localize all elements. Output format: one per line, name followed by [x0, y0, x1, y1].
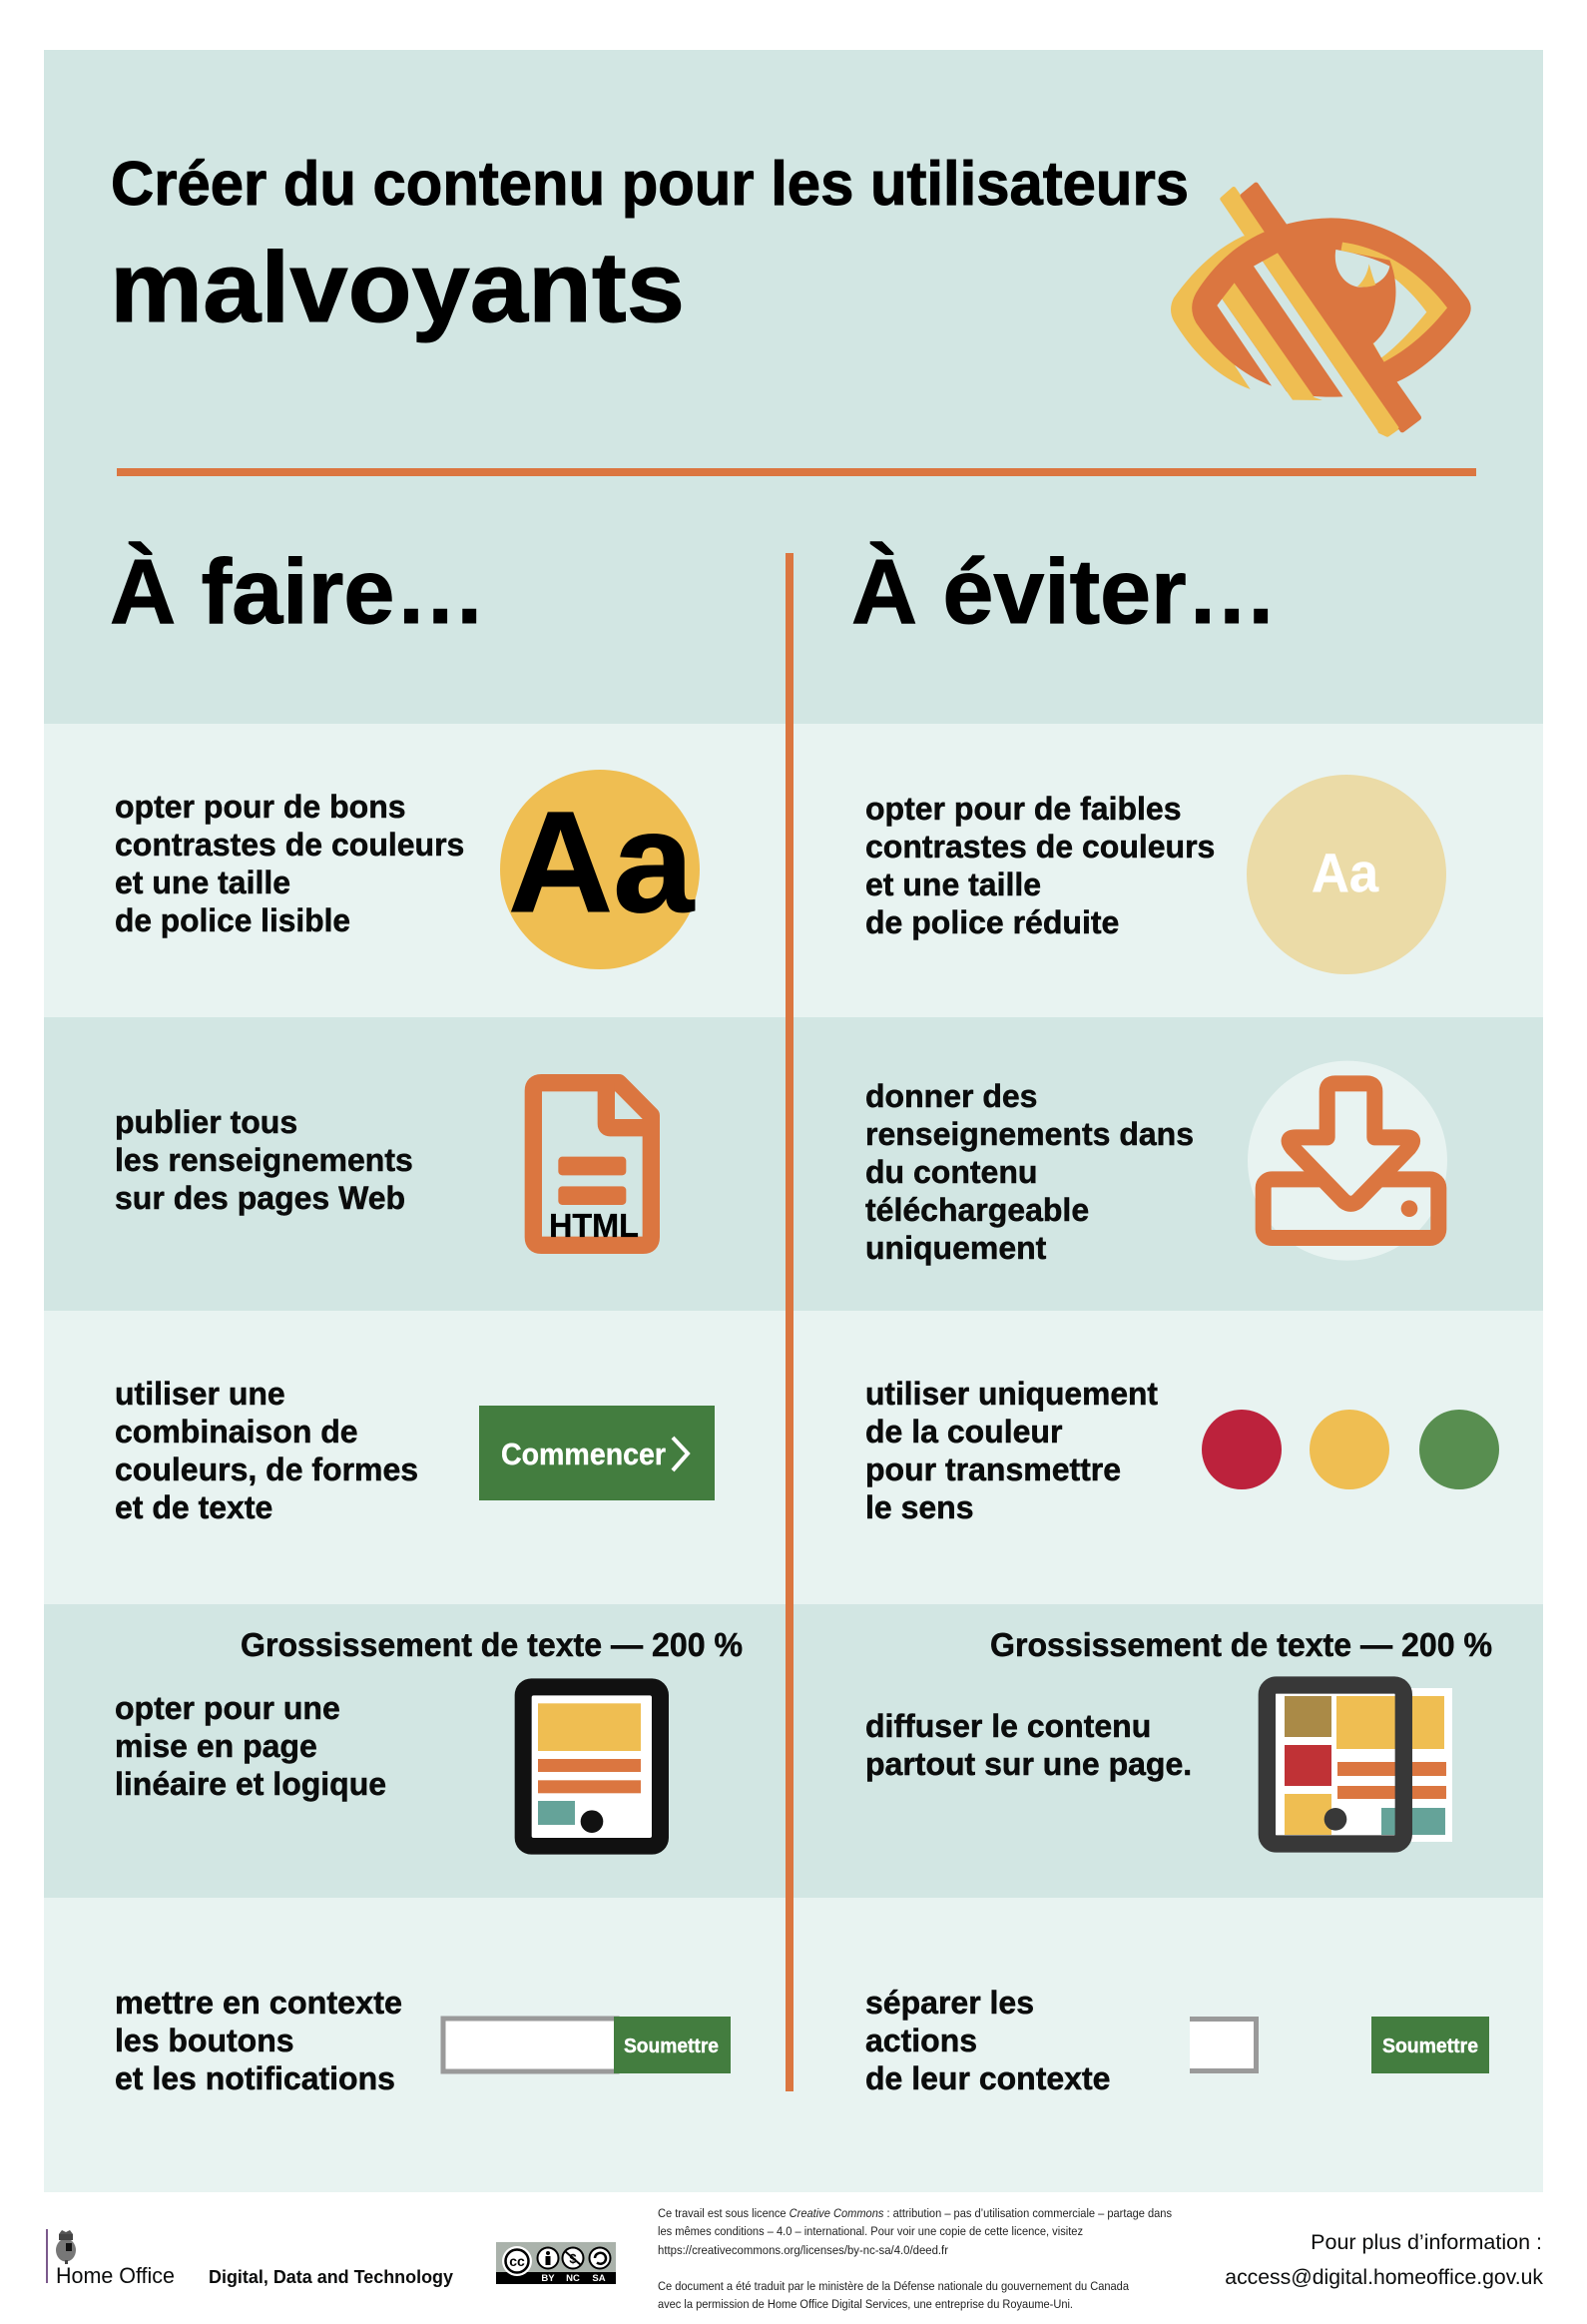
row 5 avoid: text: de leur contexte [865, 2060, 1110, 2096]
footer: contact: Pour plus d’information : [1311, 2230, 1542, 2254]
row 4 do: text: opter pour une [115, 1690, 340, 1726]
icon: crossed-out eye [1171, 185, 1471, 437]
panel: row 5 background [44, 1898, 1543, 2192]
row 4 avoid: heading: Grossissement de texte — 200 % [990, 1626, 1492, 1663]
form: input separated from button: Soumettre [1382, 2034, 1478, 2057]
row 1 avoid: text [865, 791, 1215, 940]
row 2 do: text: les renseignements [115, 1142, 413, 1178]
row 1 avoid: text: contrastes de couleurs [865, 829, 1215, 865]
row 5 avoid: text: séparer les [865, 1985, 1034, 2021]
button: Commencer: Commencer [501, 1437, 666, 1471]
row 2 avoid: text [865, 1078, 1194, 1266]
row 1 do: text: opter pour de bons [115, 789, 406, 825]
row 4 avoid: text: diffuser le contenu [865, 1708, 1151, 1744]
row 4 do: text [115, 1690, 386, 1802]
icon: low contrast Aa [1247, 775, 1446, 974]
row 2 do: text: publier tous [115, 1104, 297, 1140]
row 2 do: text: sur des pages Web [115, 1180, 405, 1216]
row 3 do: text: couleurs, de formes [115, 1452, 418, 1487]
footer: Creative Commons badge: SA [592, 2273, 606, 2284]
row 4 avoid: text [865, 1708, 1192, 1782]
row 3 avoid: text: pour transmettre [865, 1452, 1121, 1487]
icon: high contrast Aa: Aa [508, 782, 695, 942]
heading: avoid: À éviter… [851, 541, 1278, 643]
button: Commencer [479, 1406, 715, 1500]
footer: Home Office logo [46, 2229, 175, 2288]
footer: licence text: Ce document a été traduit par le ministère de la Défense nationale du gouvernement du Canada [658, 2279, 1129, 2293]
title [110, 150, 1189, 343]
row 5 do: text: les boutons [115, 2023, 294, 2058]
footer: contact: access@digital.homeoffice.gov.uk [1225, 2266, 1543, 2289]
row 3 do: text: combinaison de [115, 1414, 358, 1450]
footer: contact [1225, 2230, 1543, 2289]
row 5 do: text: mettre en contexte [115, 1985, 402, 2021]
row 2 avoid: text: renseignements dans [865, 1116, 1194, 1152]
row 4 avoid: text: partout sur une page. [865, 1746, 1192, 1782]
footer: department name: Digital, Data and Technology [209, 2266, 454, 2287]
footer: licence text: https://creativecommons.org/licenses/by-nc-sa/4.0/deed.fr [658, 2243, 948, 2257]
panel: row 2 background [44, 1017, 1543, 1311]
row 5 avoid: text: actions [865, 2023, 977, 2058]
row 5 avoid: text [865, 1985, 1110, 2096]
row 3 do: text [115, 1376, 418, 1525]
row 3 do: text: et de texte [115, 1489, 272, 1525]
row 1 avoid: text: de police réduite [865, 904, 1119, 940]
form: input attached to button [443, 2017, 731, 2073]
row 5 do: text: et les notifications [115, 2060, 395, 2096]
row 2 avoid: text: uniquement [865, 1230, 1047, 1266]
divider: vertical orange rule [786, 553, 794, 2091]
row 3 avoid: text: le sens [865, 1489, 974, 1525]
icon: low contrast Aa: Aa [1312, 842, 1378, 903]
icon: tablet with linear layout [515, 1678, 669, 1855]
panel: header background [44, 50, 1543, 724]
form: input attached to button: Soumettre [624, 2034, 719, 2057]
row 1 do: text: de police lisible [115, 902, 350, 938]
panel: row 3 background [44, 1311, 1543, 1604]
panel: row 4 background [44, 1604, 1543, 1898]
footer: Creative Commons badge: NC [566, 2273, 580, 2284]
panel: row 1 background [44, 724, 1543, 1017]
row 1 avoid: text: et une taille [865, 867, 1041, 902]
title: malvoyants [110, 232, 685, 343]
row 4 do: text: mise en page [115, 1728, 317, 1764]
row 4 do: text: linéaire et logique [115, 1766, 386, 1802]
icon: tablet with overflowing layout [1267, 1685, 1452, 1844]
row 1 do: text: et une taille [115, 865, 290, 900]
row 3 do: text: utiliser une [115, 1376, 285, 1412]
footer: Creative Commons badge: cc [509, 2253, 525, 2269]
form: input separated from button [1190, 2017, 1489, 2073]
footer: licence text [658, 2206, 1172, 2311]
divider: horizontal orange rule [117, 468, 1476, 476]
footer: Creative Commons badge: $ [569, 2251, 577, 2266]
row 1 do: text: contrastes de couleurs [115, 827, 464, 863]
row 3 avoid: text: utiliser uniquement [865, 1376, 1158, 1412]
row 5 do: text [115, 1985, 402, 2096]
row 2 avoid: text: donner des [865, 1078, 1037, 1114]
footer: Creative Commons badge: BY [541, 2273, 555, 2284]
row 1 do: text [115, 789, 464, 938]
icon: three coloured dots [1202, 1410, 1499, 1489]
row 1 avoid: text: opter pour de faibles [865, 791, 1181, 827]
row 2 avoid: text: téléchargeable [865, 1192, 1089, 1228]
icon: download [1248, 1061, 1447, 1261]
heading: do: À faire… [110, 541, 486, 643]
icon: HTML document [533, 1083, 651, 1245]
row 3 avoid: text: de la couleur [865, 1414, 1062, 1450]
footer: licence text: Ce travail est sous licence Creative Commons : attribution – pas d’utilisation commerciale – partage dans [658, 2206, 1172, 2220]
row 2 do: text [115, 1104, 413, 1216]
footer: Creative Commons badge [496, 2242, 616, 2284]
footer: Home Office logo: Home Office [56, 2263, 175, 2288]
row 4 do: heading: Grossissement de texte — 200 % [241, 1626, 743, 1663]
icon: HTML document: HTML [549, 1207, 639, 1244]
footer: licence text: avec la permission de Home Office Digital Services, une entreprise du Royaume-Uni. [658, 2297, 1073, 2311]
row 2 avoid: text: du contenu [865, 1154, 1037, 1190]
footer: licence text: les mêmes conditions – 4.0 – international. Pour voir une copie de cette licence, visitez [658, 2224, 1083, 2238]
title: Créer du contenu pour les utilisateurs [111, 150, 1189, 219]
row 3 avoid: text [865, 1376, 1158, 1525]
